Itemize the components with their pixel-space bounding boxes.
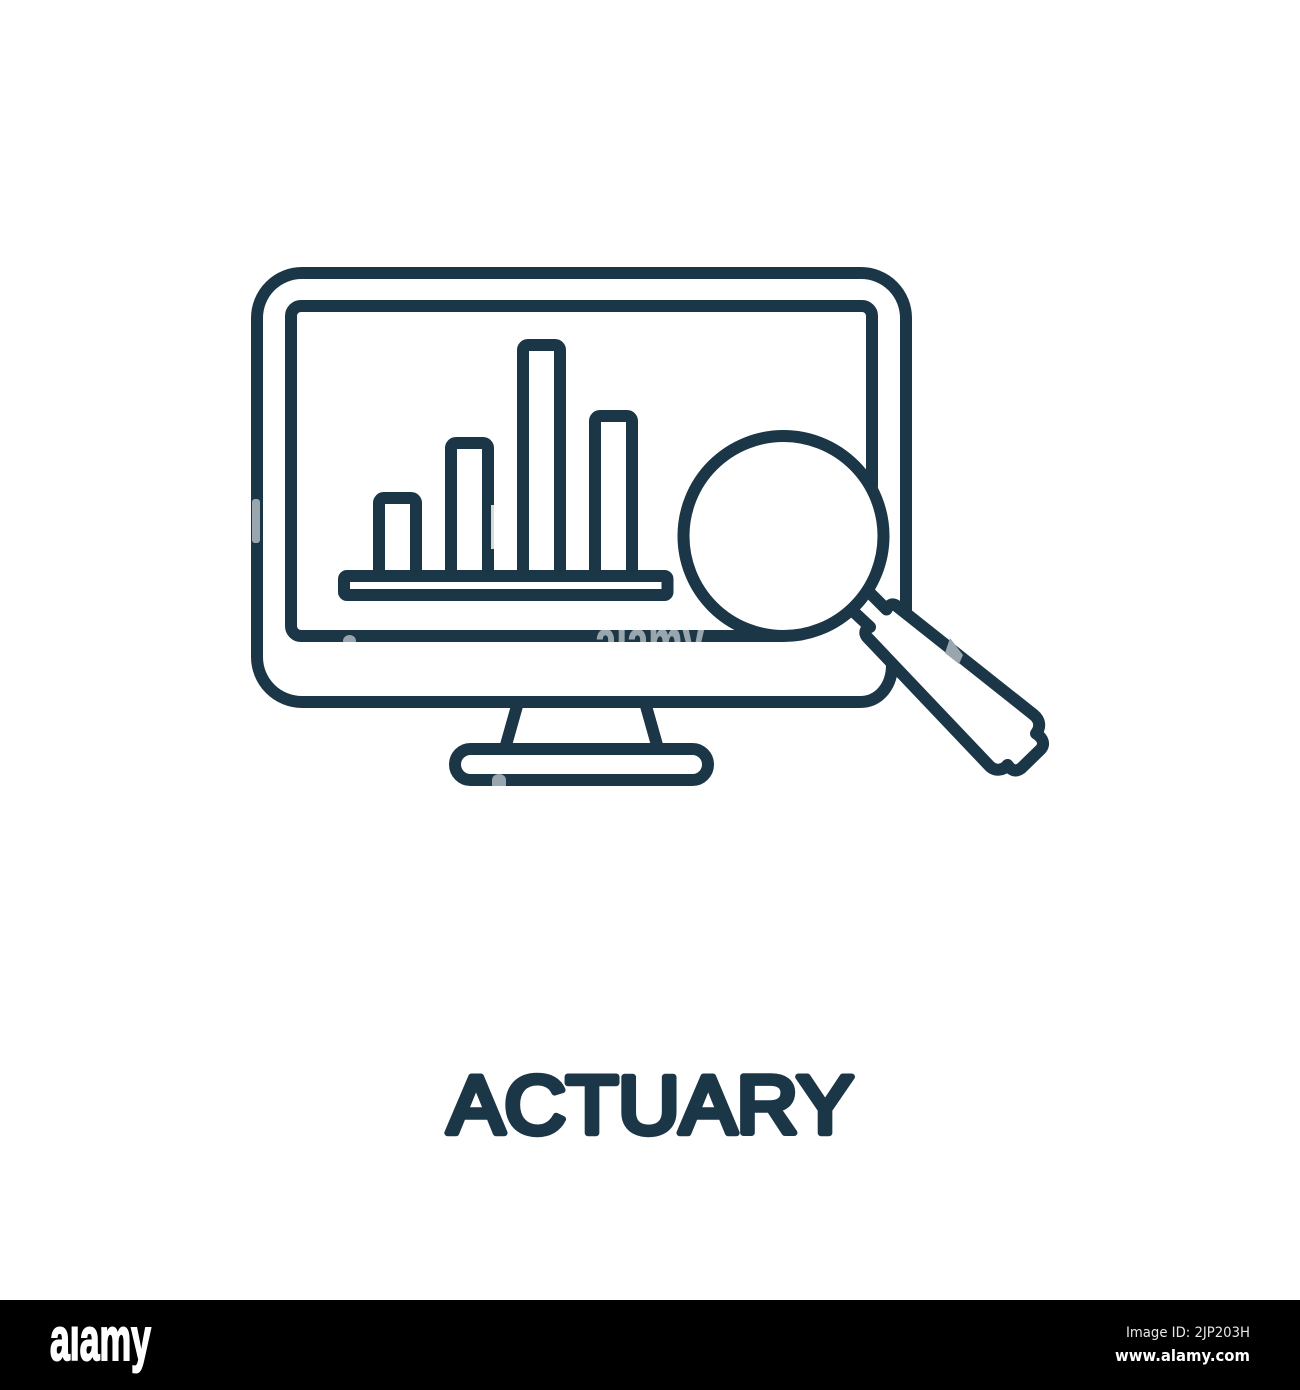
footer logo: alamy [50, 1306, 151, 1373]
icon: magnifying glass handle [855, 593, 1043, 770]
footer bar [0, 1300, 1300, 1390]
icon: magnifying glass lens [684, 436, 884, 636]
icon: monitor screen [291, 306, 872, 636]
icon: monitor stand [455, 706, 708, 780]
watermark fragments: alamy [595, 608, 704, 675]
title: ACTUARY [448, 1060, 854, 1151]
bar chart [344, 345, 668, 595]
icon: monitor with chart and magnifying glass [257, 273, 1043, 780]
icon: monitor body [257, 273, 906, 702]
website: www.alamy.com [1115, 1346, 1250, 1365]
watermark fragments [252, 499, 963, 786]
image id: Image ID: 2JP203H [1126, 1325, 1250, 1341]
